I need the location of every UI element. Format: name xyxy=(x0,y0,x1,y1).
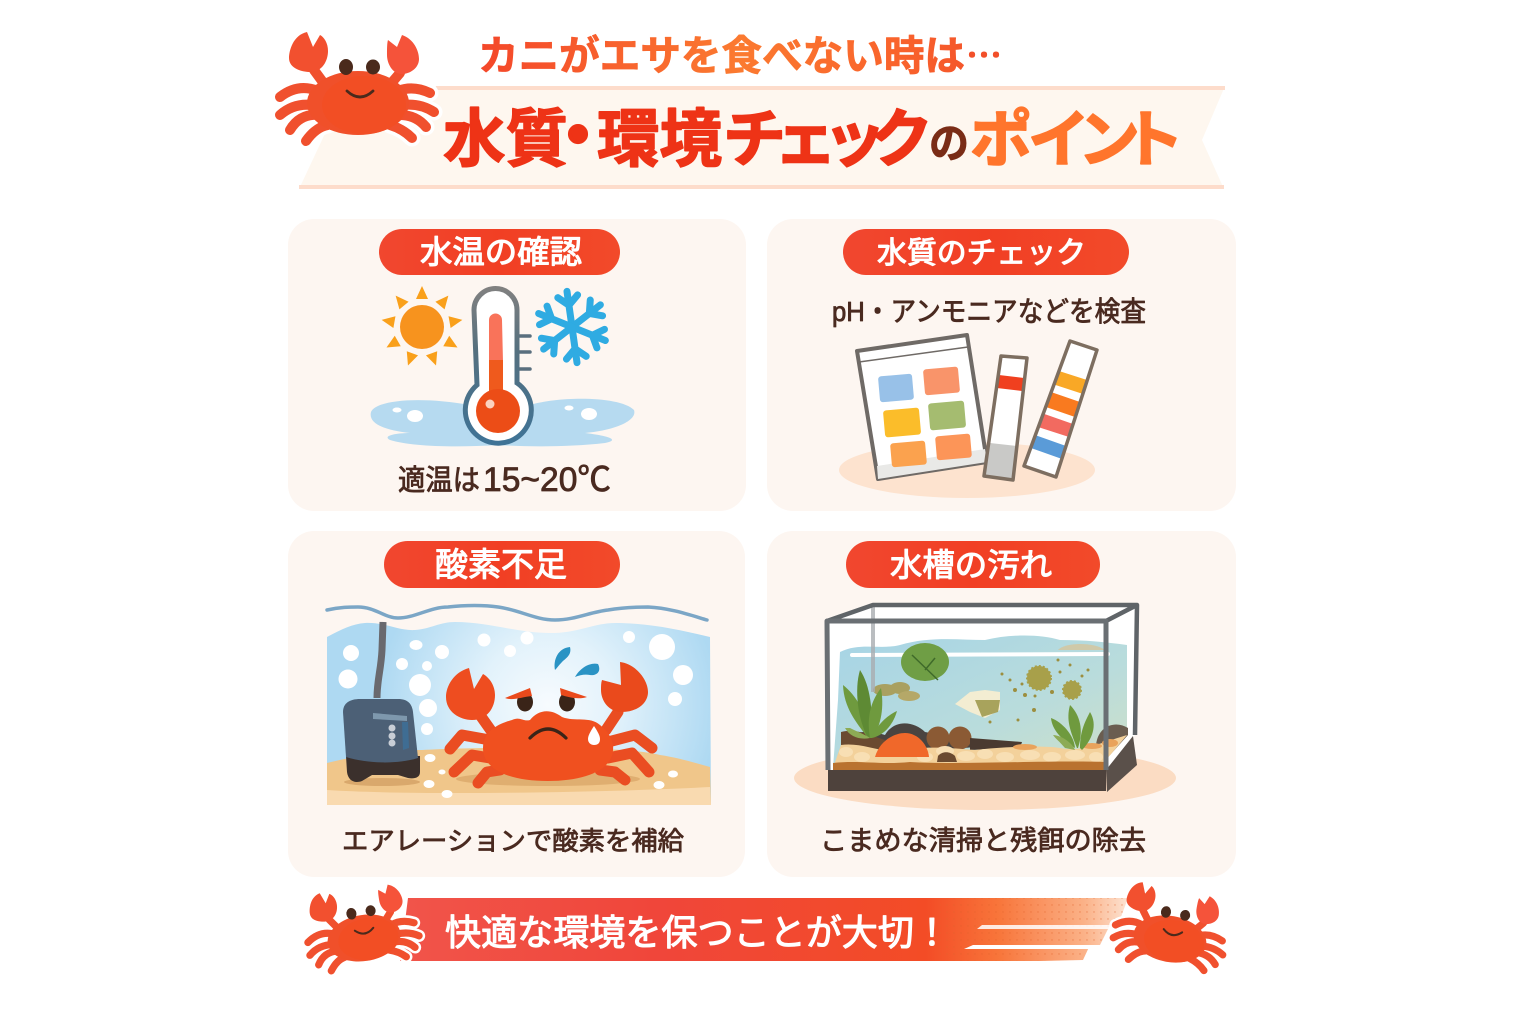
shadow ellipse xyxy=(839,442,1095,498)
icon: sun xyxy=(381,286,463,368)
rocks xyxy=(841,723,1000,755)
speed streaks xyxy=(977,925,1115,929)
pill heading: water quality check xyxy=(843,229,1129,275)
title: water quality and environment check: チェック xyxy=(723,105,933,175)
icon: test strip 2 xyxy=(1024,341,1097,477)
caption: suitable temperature xyxy=(398,461,611,499)
title: water quality and environment check xyxy=(443,86,933,177)
pill heading: lack of oxygen: 酸素不足 xyxy=(435,546,567,583)
icon: puddle xyxy=(371,399,634,446)
title: water quality and environment check: 水質 xyxy=(443,105,568,175)
title particle: の xyxy=(929,120,969,167)
title ribbon xyxy=(299,86,1225,189)
wave line xyxy=(327,606,707,620)
illustration: underwater scene xyxy=(327,606,711,805)
pill heading: water temperature xyxy=(379,229,620,275)
caption: test pH and ammonia: pH・アンモニアなどを検査 xyxy=(832,296,1146,327)
tank base xyxy=(828,770,1106,791)
debris and algae xyxy=(873,658,1090,724)
pill heading: lack of oxygen xyxy=(384,541,620,588)
panel: dirty tank xyxy=(767,531,1236,877)
panel: lack of oxygen xyxy=(288,531,745,877)
headline: when crabs won't eat: カニがエサを食べない時は xyxy=(478,33,965,79)
caption: suitable temperature: 15~20℃ xyxy=(483,461,611,499)
plants xyxy=(843,670,1094,750)
water xyxy=(833,636,1127,768)
icon: test strip 1 xyxy=(984,356,1027,480)
icon: air pump xyxy=(343,622,420,786)
icon: thermometer xyxy=(465,288,531,443)
caption: aeration: エアレーションで酸素を補給 xyxy=(342,826,684,856)
orange shell xyxy=(875,733,929,757)
pill heading: dirty tank: 水槽の汚れ xyxy=(890,547,1052,583)
title: points: ポイント xyxy=(970,106,1184,175)
icon: bottom-right crab xyxy=(1110,879,1233,975)
shadow ellipse xyxy=(794,746,1176,810)
caption: regular cleaning: こまめな清掃と残餌の除去 xyxy=(820,826,1146,856)
panel: water quality xyxy=(767,219,1236,511)
gravel xyxy=(833,735,1127,770)
panel: water temperature xyxy=(288,219,746,511)
icon: snowflake xyxy=(535,290,609,364)
pill heading: water temperature: 水温の確認 xyxy=(420,234,582,270)
headline: when crabs won't eat: … xyxy=(966,27,1002,79)
illustration: aquarium xyxy=(827,605,1137,792)
bottom banner xyxy=(400,898,1128,961)
title: water quality and environment check: 環境 xyxy=(597,105,722,175)
bubbles xyxy=(338,631,693,798)
icon: sad crab xyxy=(446,647,652,786)
pill heading: water quality check: 水質のチェック xyxy=(877,237,1086,270)
banner message: 快適な環境を保つことが大切！ xyxy=(445,912,950,953)
pill heading: dirty tank xyxy=(846,541,1100,588)
title: water quality and environment check: ・ xyxy=(546,86,610,177)
glass frame xyxy=(827,605,1137,770)
floating leaf xyxy=(901,643,949,681)
caption: suitable temperature: 適温は xyxy=(398,464,480,497)
icon: bottom-left crab xyxy=(301,879,422,974)
icon: title crab xyxy=(280,32,434,141)
icon: test kit card xyxy=(857,335,987,479)
